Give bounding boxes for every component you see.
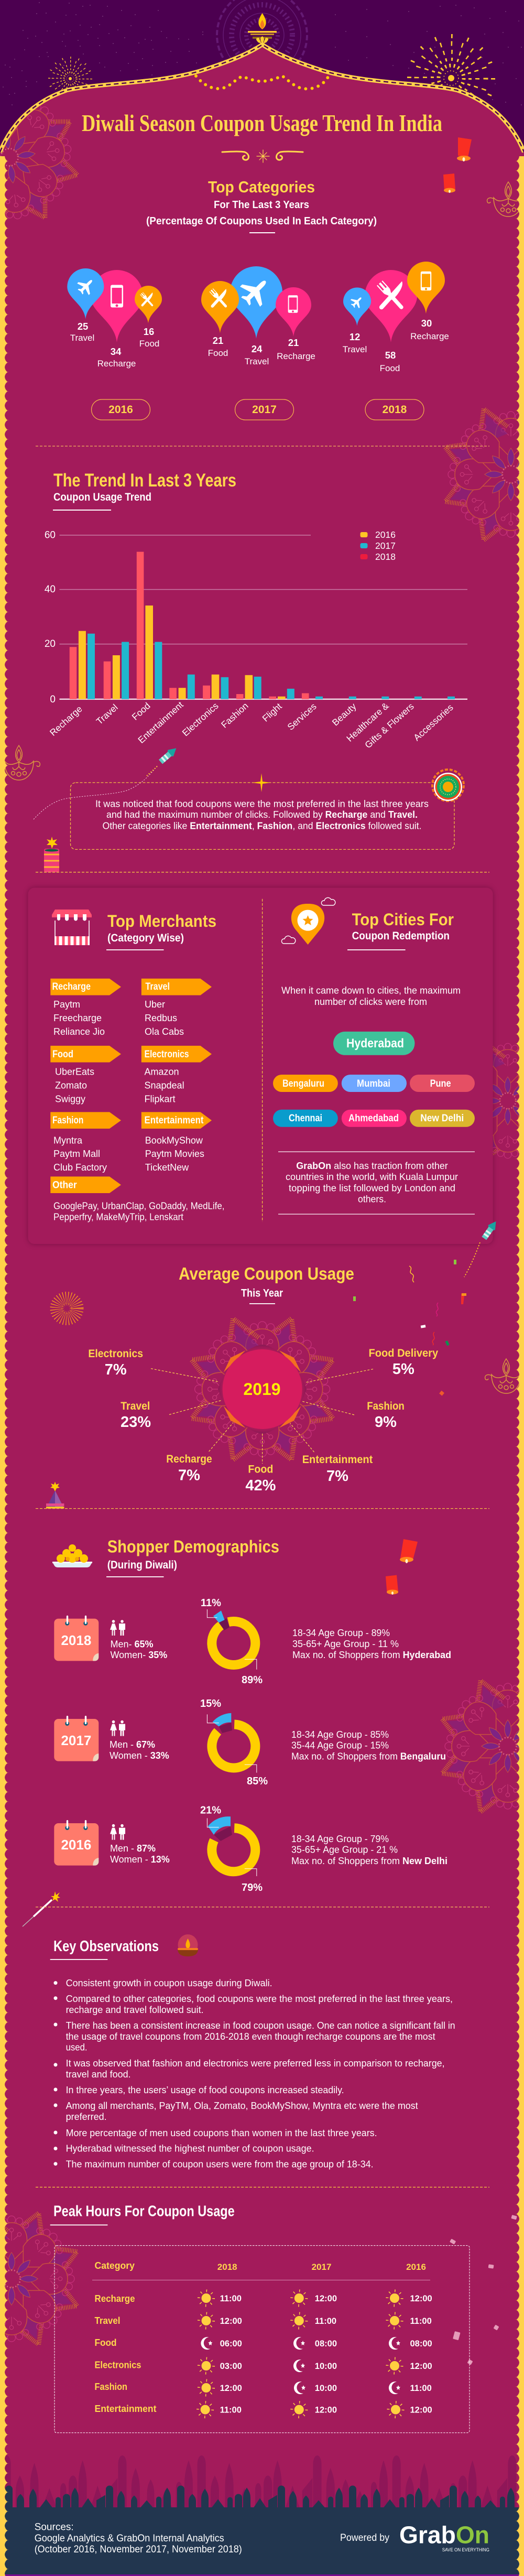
bubble chart 2017: Recharge: [277, 351, 315, 361]
table times: 11:00: [315, 2317, 336, 2326]
demographics 2018: Women- 35%: [110, 1650, 167, 1660]
panel: merchants and cities: [28, 887, 493, 1244]
mandala with 2019 centre: 2019: [243, 1380, 281, 1399]
merchants: fashion: Myntra: [53, 1135, 83, 1146]
bar chart: Entertainment: [136, 699, 185, 745]
demographics 2017: Men - 67%: [110, 1739, 155, 1750]
mandala: top left: [0, 105, 79, 219]
heading: shopper demographics: (During Diwali): [107, 1559, 177, 1571]
cities intro: [281, 985, 461, 1007]
city pills: Mumbai: [357, 1078, 390, 1089]
demographics 2017: [54, 1698, 446, 1787]
bar chart: Healthcare &: [344, 700, 391, 744]
heading: trend: The Trend In Last 3 Years: [53, 470, 236, 491]
callout: chart note: and had the maximum number of clicks. Followed by Recharge and Travel.: [106, 809, 418, 820]
labels: average coupon usage: Electronics: [88, 1348, 143, 1360]
table header: 2016: [406, 2262, 426, 2272]
icon: lit diya: [178, 1934, 198, 1956]
merchants: recharge: [50, 979, 121, 1037]
list: key observations: It was observed that fashion and electronics were preferred less in comparison to recharge,: [66, 2058, 445, 2069]
labels: average coupon usage: Fashion: [367, 1400, 405, 1412]
merchants: entertainment: TicketNew: [145, 1162, 189, 1173]
powered by logo: GrabOn: [399, 2521, 489, 2549]
bar chart: Food: [130, 700, 152, 722]
bar chart: Electronics: [180, 700, 221, 738]
heading: top merchants: Top Merchants: [107, 912, 216, 930]
lanterns: [386, 1539, 418, 1595]
merchants: fashion: Fashion: [52, 1115, 83, 1126]
icon: market stall: [52, 910, 92, 945]
heading: shopper demographics: Shopper Demographics: [107, 1537, 279, 1556]
merchants: electronics: Amazon: [145, 1066, 179, 1077]
list: key observations: Consistent growth in coupon usage during Diwali.: [66, 1978, 272, 1988]
icon: location pin and clouds: [281, 897, 335, 945]
arch border: [0, 45, 524, 152]
section: top categories heading: Top Categories: [208, 178, 315, 196]
table row labels: Food: [94, 2337, 116, 2348]
merchants: fashion: Paytm Mall: [53, 1149, 100, 1159]
table row labels: Travel: [94, 2315, 121, 2326]
labels: average coupon usage: 7%: [178, 1467, 200, 1484]
table times: 11:00: [220, 2406, 242, 2415]
merchants: recharge: Freecharge: [53, 1013, 102, 1023]
bar chart: Recharge: [48, 703, 84, 738]
bubble chart 2016: Food: [139, 339, 159, 349]
labels: average coupon usage: 7%: [326, 1468, 348, 1485]
table times: 11:00: [410, 2317, 432, 2326]
merchants: food: Food: [52, 1049, 73, 1060]
bubble chart 2017: Food: [208, 348, 228, 358]
heading: trend: [53, 470, 236, 511]
labels: average coupon usage: 9%: [375, 1414, 397, 1431]
merchants: travel: Uber: [145, 999, 165, 1010]
bubble chart 2018: 12: [350, 331, 360, 342]
bubble chart 2017: 24: [252, 343, 263, 354]
skyline front: [5, 2486, 515, 2508]
heading: top cities: [347, 910, 454, 950]
merchants: recharge: Paytm: [53, 999, 80, 1010]
firework orange: [57, 1298, 78, 1319]
demographics 2018: 2018: [61, 1632, 91, 1648]
heading: top merchants: (Category Wise): [107, 932, 184, 944]
GrabOn note: GrabOn also has traction from other: [296, 1161, 448, 1171]
labels: average coupon usage: 7%: [105, 1361, 127, 1378]
bar chart: 60: [45, 529, 56, 541]
bubble chart 2016: Travel: [70, 333, 94, 343]
labels: average coupon usage: 5%: [392, 1361, 414, 1378]
bar chart: Travel: [94, 702, 120, 727]
GrabOn note: topping the list followed by London and: [289, 1183, 455, 1193]
table header: [94, 2260, 426, 2272]
demographics 2018: Men- 65%: [110, 1639, 154, 1649]
table times: 12:00: [220, 2384, 242, 2393]
merchants: entertainment: [141, 1112, 212, 1173]
demographics 2016: Men - 87%: [110, 1843, 156, 1854]
callout: chart note: Other categories like Entertainment, Fashion, and Electronics followed suit.: [103, 821, 421, 831]
city pills: Pune: [430, 1078, 451, 1089]
title flourish: [222, 150, 303, 163]
mandala: bottom right section 1: [431, 394, 524, 555]
pale tags: [450, 2215, 517, 2365]
demographics 2016: 79%: [242, 1882, 263, 1893]
heading: average coupon usage: [179, 1264, 354, 1304]
labels: average coupon usage: 23%: [121, 1414, 151, 1431]
outline diya left: [5, 745, 40, 780]
merchants: travel: Ola Cabs: [145, 1026, 184, 1037]
heading: peak hours: Peak Hours For Coupon Usage: [53, 2203, 235, 2220]
year pills: 2016: [108, 404, 133, 416]
bubble chart 2018: Recharge: [410, 331, 449, 341]
bar chart: Beauty: [330, 701, 358, 728]
table header: 2017: [312, 2262, 331, 2272]
labels: average coupon usage: Travel: [121, 1400, 150, 1412]
city pills: [273, 1075, 475, 1127]
rocket with trail: [34, 745, 179, 819]
bar chart: 20: [45, 638, 56, 650]
table row labels: Entertainment: [94, 2403, 156, 2414]
list: key observations: In three years, the users’ usage of food coupons increased steadily.: [66, 2085, 344, 2095]
heading: top cities: Top Cities For: [352, 910, 454, 929]
bubble chart 2016: 34: [111, 346, 122, 357]
demographics 2016: 2016: [61, 1837, 91, 1853]
bubble chart 2017: [201, 266, 315, 366]
sources: (October 2016, November 2017, November 2018): [35, 2544, 242, 2555]
city pills: Ahmedabad: [348, 1113, 399, 1124]
list: key observations: More percentage of men used coupons than women in the last three years.: [66, 2128, 377, 2138]
merchants: travel: Travel: [145, 981, 170, 992]
bubble chart 2016: 25: [78, 321, 88, 332]
merchants: electronics: Electronics: [145, 1049, 189, 1060]
table times: 08:00: [410, 2339, 432, 2348]
merchants: entertainment: Paytm Movies: [145, 1149, 204, 1159]
diya on top of arch: [248, 13, 277, 44]
list: key observations: Among all merchants, PayTM, Ola, Zomato, BookMyShow, Myntra etc were the most: [66, 2101, 418, 2111]
bubble chart 2018: Travel: [343, 344, 367, 354]
table times: [220, 2294, 432, 2415]
demographics 2016: Max no. of Shoppers from New Delhi: [291, 1856, 447, 1866]
table times: 10:00: [315, 2362, 337, 2371]
merchants: entertainment: Entertainment: [145, 1115, 204, 1126]
merchants: food: UberEats: [55, 1066, 94, 1077]
demographics 2016: 18-34 Age Group - 79%: [291, 1834, 389, 1844]
demographics 2018: 11%: [201, 1597, 221, 1609]
table row labels: [94, 2293, 156, 2414]
bubble chart 2017: 21: [213, 335, 223, 346]
table row labels: Recharge: [94, 2293, 135, 2304]
table times: 12:00: [410, 2362, 432, 2371]
powered by logo: [340, 2521, 489, 2552]
bubble chart 2018: 58: [385, 350, 396, 361]
labels: average coupon usage: 42%: [245, 1477, 276, 1494]
powered by logo: SAVE ON EVERYTHING: [442, 2547, 489, 2552]
merchants: food: Swiggy: [55, 1094, 85, 1104]
section: top categories heading: (Percentage Of Coupons Used In Each Category): [146, 215, 377, 227]
heading: average coupon usage: Average Coupon Usage: [179, 1264, 354, 1283]
mandala: demographics right: [428, 1666, 524, 1826]
GrabOn note: countries in the world, with Kuala Lumpur: [286, 1172, 458, 1182]
table times: 03:00: [220, 2362, 242, 2371]
table times: 06:00: [220, 2339, 242, 2348]
labels: average coupon usage: Food: [248, 1464, 273, 1476]
mandala with 2019 centre: [176, 1303, 348, 1475]
bar chart: Gifts & Flowers: [363, 701, 416, 750]
callout: chart note: [70, 773, 454, 849]
labels: average coupon usage: Food Delivery: [369, 1347, 438, 1359]
demographics 2017: 18-34 Age Group - 85%: [291, 1729, 389, 1740]
icon: sweets plate: [52, 1544, 92, 1567]
mandala: peak hours left: [0, 2199, 92, 2359]
table times: 10:00: [315, 2384, 337, 2393]
merchants: fashion: [50, 1112, 121, 1173]
demographics 2016: Women - 13%: [110, 1854, 170, 1865]
table times: 12:00: [315, 2406, 337, 2415]
city: Hyderabad: [333, 1032, 415, 1055]
firework right: [409, 36, 493, 120]
demographics 2017: Max no. of Shoppers from Bengaluru: [291, 1751, 446, 1762]
bar chart: [45, 529, 467, 750]
chart legend: [361, 529, 396, 562]
demographics 2018: 35-65+ Age Group - 11 %: [292, 1639, 399, 1649]
demographics 2017: Women - 33%: [110, 1750, 169, 1761]
bar chart: 40: [45, 584, 56, 595]
party cone: [46, 1481, 64, 1509]
year pills: [91, 399, 424, 420]
demographics 2018: Max no. of Shoppers from Hyderabad: [292, 1650, 451, 1660]
cities intro: When it came down to cities, the maximum: [281, 985, 461, 995]
mandala: behind merchants panel right: [434, 1027, 524, 1174]
demographics 2017: 2017: [61, 1733, 91, 1748]
section: top categories heading: [146, 178, 377, 233]
table times: 12:00: [410, 2294, 432, 2303]
table times: 11:00: [220, 2294, 242, 2303]
heading: top cities: Coupon Redemption: [352, 930, 450, 942]
merchants: entertainment: BookMyShow: [145, 1135, 203, 1146]
table times: 12:00: [220, 2317, 242, 2326]
skyline back: [3, 2455, 524, 2508]
lantern small: [443, 174, 455, 193]
demographics 2016: 21%: [200, 1805, 221, 1816]
bubble chart 2016: Recharge: [97, 359, 136, 369]
chart legend: 2016: [375, 529, 396, 540]
chakra firework: [432, 770, 464, 801]
sources: [35, 2521, 242, 2555]
cities intro: number of clicks were from: [314, 997, 427, 1007]
chart legend: 2017: [375, 540, 396, 551]
list: key observations: Hyderabad witnessed the highest number of coupon usage.: [66, 2144, 314, 2154]
table header: Category: [94, 2260, 135, 2271]
heading: top merchants: [106, 912, 216, 950]
demographics 2018: 89%: [242, 1674, 263, 1686]
table header: 2018: [217, 2262, 237, 2272]
merchants: travel: Redbus: [145, 1013, 177, 1023]
labels: average coupon usage: Recharge: [166, 1453, 212, 1465]
chart legend: 2018: [375, 551, 396, 562]
footer band: [0, 2507, 524, 2576]
table times: 08:00: [315, 2339, 337, 2348]
list: key observations: The maximum number of coupon users were from the age group of 18-34.: [66, 2159, 374, 2169]
list: key observations: the usage of travel coupons from 2016-2018 even though recharge coupons are the most: [66, 2031, 435, 2042]
city: Hyderabad: Hyderabad: [346, 1036, 404, 1051]
heading: average coupon usage: This Year: [241, 1287, 283, 1299]
bar chart: 0: [50, 694, 56, 705]
merchants: electronics: [141, 1046, 212, 1104]
list: key observations: There has been a consistent increase in food coupon usage. One can notice a significant fall in: [66, 2020, 455, 2031]
sources: Google Analytics & GrabOn Internal Analytics: [35, 2533, 224, 2544]
confetti: [353, 1260, 466, 1396]
demographics 2016: [54, 1805, 447, 1893]
bar chart: Fashion: [219, 700, 250, 730]
merchants: other: GooglePay, UrbanClap, GoDaddy, MedLife,: [53, 1201, 224, 1211]
bar chart: Flight: [260, 701, 284, 724]
bar chart: Accessories: [411, 702, 455, 743]
heading: trend: Coupon Usage Trend: [53, 491, 151, 503]
table icons: [198, 2291, 403, 2417]
merchants: electronics: Flipkart: [145, 1094, 176, 1104]
callout: chart note: It was noticed that food coupons were the most preferred in the last three years: [95, 798, 429, 809]
table row labels: Fashion: [94, 2381, 127, 2392]
table row labels: Electronics: [94, 2359, 141, 2370]
outline diya: [485, 1359, 520, 1393]
lantern: [457, 137, 472, 161]
list: key observations: used.: [66, 2042, 88, 2053]
merchants: food: Zomato: [55, 1080, 87, 1090]
table times: 12:00: [315, 2294, 337, 2303]
demographics 2017: 85%: [247, 1776, 268, 1787]
GrabOn note: others.: [358, 1194, 386, 1204]
heading: key observations: Key Observations: [53, 1938, 159, 1955]
labels: average coupon usage: Entertainment: [302, 1454, 373, 1466]
city pills: Chennai: [289, 1113, 322, 1124]
table times: 12:00: [410, 2406, 432, 2415]
bubble chart 2018: 30: [421, 318, 432, 329]
mandala behind diya: [217, 0, 307, 80]
sources: Sources:: [35, 2521, 74, 2532]
leader lines: [151, 1369, 373, 1464]
merchants: other: Other: [52, 1179, 77, 1190]
merchants: recharge: Reliance Jio: [53, 1026, 105, 1037]
city pills: Bengaluru: [282, 1078, 324, 1089]
bar chart: Services: [285, 701, 319, 732]
bubble chart 2016: 16: [144, 326, 154, 337]
merchants: food: [50, 1046, 121, 1104]
demographics 2018: 18-34 Age Group - 89%: [292, 1628, 390, 1638]
demographics 2017: 15%: [200, 1698, 221, 1709]
bubble chart 2016: [67, 268, 162, 369]
table: peak hours: [54, 2246, 470, 2433]
outline diya right: [487, 182, 522, 217]
merchants: travel: [141, 979, 212, 1037]
heading: shopper demographics: [106, 1537, 279, 1577]
year pills: 2017: [252, 404, 277, 416]
year pills: 2018: [383, 404, 407, 416]
firework left: [49, 58, 91, 100]
bubble chart 2018: [343, 262, 449, 373]
merchants: other: [50, 1176, 225, 1222]
rocket two: [464, 1219, 499, 1277]
merchants: electronics: Snapdeal: [145, 1080, 184, 1090]
bubble chart 2017: Travel: [245, 356, 269, 366]
GrabOn note: [278, 1151, 475, 1215]
powered by logo: Powered by: [340, 2532, 389, 2543]
demographics 2018: [54, 1597, 451, 1686]
city pills: New Delhi: [420, 1113, 464, 1124]
labels: average coupon usage: [88, 1347, 438, 1494]
demographics 2017: 35-44 Age Group - 15%: [291, 1740, 389, 1751]
merchants: other: Pepperfry, MakeMyTrip, Lenskart: [53, 1212, 183, 1222]
list: key observations: Compared to other categories, food coupons were the most preferred in the last three years,: [66, 1994, 453, 2004]
list: key observations: preferred.: [66, 2112, 107, 2122]
list: key observations: travel and food.: [66, 2069, 131, 2080]
section: top categories heading: For The Last 3 Years: [214, 199, 309, 211]
demographics 2016: 35-65+ Age Group - 21 %: [291, 1845, 398, 1855]
sparkler: [23, 1891, 60, 1926]
bubble chart 2017: 21: [288, 337, 299, 348]
bubble chart 2018: Food: [380, 363, 400, 373]
starry sky: [3, 3, 521, 105]
list: key observations: recharge and travel followed suit.: [66, 2005, 204, 2015]
table times: 11:00: [410, 2384, 432, 2393]
string of lights: [196, 76, 329, 89]
merchants: recharge: Recharge: [52, 981, 91, 992]
list: key observations: [53, 1978, 455, 2169]
merchants: fashion: Club Factory: [53, 1162, 107, 1173]
firecracker: [44, 837, 59, 872]
